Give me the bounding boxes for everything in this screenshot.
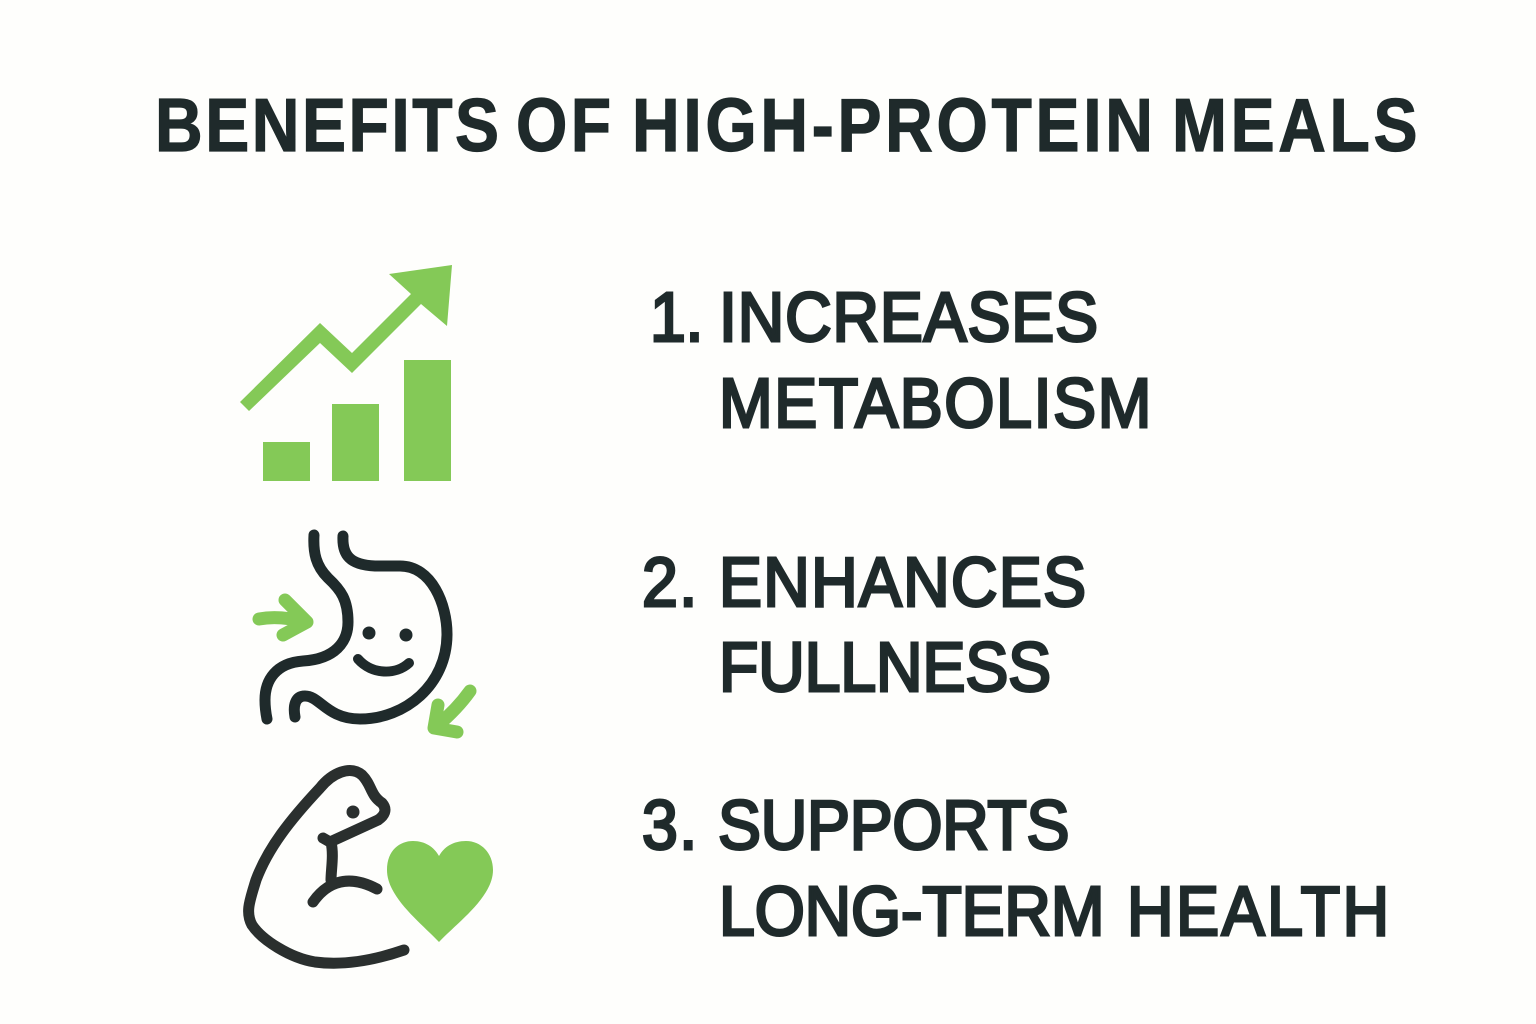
title: MEALS bbox=[1172, 83, 1418, 167]
benefit 3 text: SUPPORTS bbox=[718, 787, 1069, 865]
title bbox=[155, 83, 1418, 167]
icon: rising bar chart with arrow bbox=[240, 265, 452, 481]
benefit 3 text: HEALTH bbox=[1127, 873, 1389, 951]
benefit 1 text: INCREASES bbox=[719, 279, 1098, 357]
benefit 2 text bbox=[642, 544, 1086, 707]
benefit 3 text: 3. bbox=[642, 787, 697, 865]
benefit 2 text: FULLNESS bbox=[719, 629, 1051, 707]
benefit 1 text bbox=[650, 279, 1151, 443]
benefit 3 text: LONG-TERM bbox=[719, 873, 1104, 951]
benefit 2 text: ENHANCES bbox=[719, 544, 1086, 622]
title: HIGH-PROTEIN bbox=[632, 83, 1153, 167]
benefit 2 text: 2. bbox=[642, 544, 697, 622]
title: OF bbox=[516, 83, 611, 167]
icon: flexed arm with heart bbox=[249, 771, 493, 963]
benefit 3 text bbox=[642, 787, 1389, 951]
title: BENEFITS bbox=[155, 83, 499, 167]
benefit 1 text: METABOLISM bbox=[719, 365, 1151, 443]
icon: smiling stomach with arrows bbox=[259, 535, 470, 732]
benefit 1 text: 1. bbox=[650, 279, 703, 357]
